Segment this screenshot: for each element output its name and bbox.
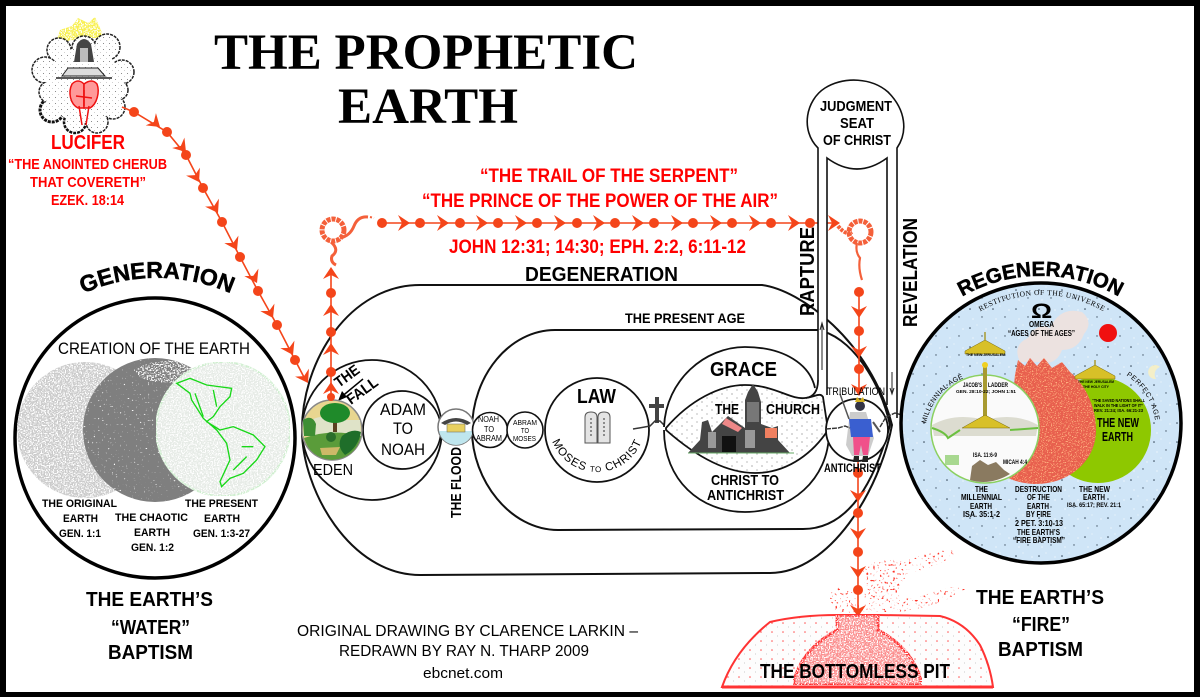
earth: original <box>17 362 153 498</box>
new earth text <box>1092 398 1145 444</box>
earth: present <box>156 362 290 496</box>
heading: generation: GENERATION <box>80 262 236 293</box>
label: judgment seat of Christ: SEAT <box>840 115 874 132</box>
cloud interior <box>33 35 133 132</box>
planet: millennial earth <box>931 362 1039 483</box>
arrow: horizontal trail <box>377 215 840 231</box>
label: millennial earth: ISA. 35:1-2 <box>963 509 1000 519</box>
icon: the flood <box>438 409 474 445</box>
earth labels: THE PRESENT <box>185 498 258 510</box>
Lucifer text <box>8 132 167 209</box>
fire baptism caption: “FIRE” <box>1012 614 1070 636</box>
icon: light rays <box>56 17 104 43</box>
heading: grace: GRACE <box>710 359 777 381</box>
icon: fire crescent <box>1005 358 1096 484</box>
Lucifer text: THAT COVERETH” <box>30 174 146 191</box>
credit text <box>297 623 638 682</box>
the fall label and arrow: FALL <box>343 374 382 408</box>
serpent trail text: “THE TRAIL OF THE SERPENT” <box>480 166 738 187</box>
arrow: trail down to the pit <box>850 287 867 640</box>
millennial age arc label: MILLENNIAL AGE <box>922 374 964 424</box>
panel: regeneration circle <box>899 262 1183 565</box>
earth labels: GEN. 1:3-27 <box>193 528 250 540</box>
icon: omega: Ω <box>1031 300 1052 323</box>
earth labels: THE CHAOTIC <box>115 512 188 524</box>
panel: Adam to Noah <box>363 391 441 469</box>
icon: stone tablets <box>585 412 610 443</box>
icon: Jacob's ladder <box>962 362 1010 428</box>
label: restitution of the universe: RESTITUTION OF THE UNIVERSE <box>978 290 1105 312</box>
label: destruction of the earth: “FIRE BAPTISM” <box>1013 535 1065 545</box>
label: judgment seat of Christ: JUDGMENT <box>820 98 892 115</box>
new earth text: EARTH <box>1102 429 1133 444</box>
panel: Abram to Moses: TO <box>521 428 529 435</box>
panel: Noah to Abram <box>472 412 508 448</box>
earth labels <box>42 498 258 554</box>
water baptism caption: BAPTISM <box>108 642 193 664</box>
panel: Noah to Abram: TO <box>484 425 494 434</box>
panel: Noah to Abram: ABRAM <box>476 434 502 443</box>
icon: antichrist figure <box>840 394 880 462</box>
label: the church <box>715 401 820 418</box>
labels: tribulation and antichrist: ANTICHRIST <box>824 461 882 475</box>
inner mound <box>793 615 922 685</box>
scripture text: ISA. 11:6-9 <box>973 453 998 459</box>
icon: red sun <box>1099 324 1117 342</box>
icon: crescent moon <box>1148 365 1160 379</box>
new earth text: REV. 21:24; ISA. 66:21-23 <box>1094 408 1143 413</box>
icon: serpent left <box>322 217 374 265</box>
label: millennial earth: THE <box>975 484 988 494</box>
panel: Abram to Moses <box>507 412 543 448</box>
church lens <box>666 385 828 473</box>
icon: red angel <box>70 81 98 125</box>
earth labels: THE ORIGINAL <box>42 498 117 510</box>
serpent trail text <box>422 166 778 258</box>
panel: Adam to Noah: TO <box>393 419 413 438</box>
label: Moses to Christ: MOSES TO CHRIST <box>552 438 640 472</box>
label: judgment seat of Christ: OF CHRIST <box>823 132 891 149</box>
label: millennial earth: MILLENNIAL <box>961 492 1002 502</box>
label: the church: THE <box>715 401 739 418</box>
label: destruction of the earth: OF THE <box>1027 492 1050 502</box>
label: Christ to Antichrist: ANTICHRIST <box>707 487 784 504</box>
earth labels: EARTH <box>204 513 240 525</box>
fire baptism caption: BAPTISM <box>998 639 1083 661</box>
panel: Adam to Noah: NOAH <box>381 440 425 459</box>
earth labels: GEN. 1:1 <box>59 528 101 540</box>
label: destruction of the earth <box>1013 484 1065 545</box>
scripture text: MICAH 4:4 <box>1003 460 1028 466</box>
label: omega ages <box>1008 320 1075 338</box>
arrow: rapture up <box>820 323 824 370</box>
new earth text: “THE SAVED NATIONS SHALL <box>1092 398 1145 403</box>
panel: Grace and the church <box>664 347 829 512</box>
panel: generation circle <box>13 262 297 580</box>
the fall label and arrow: THE <box>331 362 363 391</box>
icon: cloud <box>32 34 134 133</box>
panel: Law <box>544 377 650 483</box>
credit text: ORIGINAL DRAWING BY CLARENCE LARKIN – <box>297 623 638 640</box>
label: the new earth <box>1067 484 1121 509</box>
label: the new earth: THE NEW <box>1079 484 1111 494</box>
arrow: revelation down <box>890 372 894 394</box>
earth labels: EARTH <box>134 527 170 539</box>
label: judgment seat of Christ <box>820 98 892 149</box>
panel: Noah to Abram: NOAH <box>478 415 499 424</box>
heading: regeneration: REGENERATION <box>956 262 1124 296</box>
label: Eden: EDEN <box>313 462 353 479</box>
new earth text: THE NEW <box>1097 415 1140 430</box>
icon: smoke <box>1017 311 1089 363</box>
label: Christ to Antichrist <box>707 472 784 504</box>
jacob's ladder text <box>956 383 1017 394</box>
title: THE PROPHETIC <box>214 25 638 81</box>
label: Christ to Antichrist: CHRIST TO <box>711 472 779 489</box>
panel: Abram to Moses: MOSES <box>513 436 536 443</box>
label: omega ages: “AGES OF THE AGES” <box>1008 329 1075 338</box>
serpent trail text: “THE PRINCE OF THE POWER OF THE AIR” <box>422 191 778 212</box>
label: the flood: THE FLOOD <box>448 447 465 518</box>
jacob's ladder text: LADDER <box>988 383 1009 389</box>
title: EARTH <box>338 79 518 135</box>
icon: Lucifer cherub in cloud <box>32 17 134 133</box>
label: millennial earth: EARTH <box>970 501 992 511</box>
icon: new Jerusalem left <box>965 332 1006 357</box>
Lucifer text: EZEK. 18:14 <box>51 192 125 209</box>
arrow: diagonal trail from Lucifer <box>122 107 315 387</box>
icon: church building <box>688 384 794 453</box>
icon: cross and mound <box>633 397 678 429</box>
perfect age arc label: PERFECT AGE <box>1126 372 1160 420</box>
new earth text: WALK IN THE LIGHT OF IT” <box>1094 403 1143 408</box>
title <box>214 25 638 135</box>
icon: throne <box>56 39 112 78</box>
label: the bottomless pit: THE BOTTOMLESS PIT <box>760 661 950 683</box>
earth labels: GEN. 1:2 <box>131 542 174 554</box>
credit text: REDRAWN BY RAY N. THARP 2009 <box>339 643 589 660</box>
earth labels: EARTH <box>63 513 98 525</box>
fire baptism caption <box>976 587 1104 661</box>
icon: americas outline <box>177 378 265 487</box>
mound <box>826 413 905 429</box>
icon: serpent right <box>838 221 871 280</box>
label: destruction of the earth: EARTH <box>1027 501 1049 511</box>
water baptism caption <box>86 589 213 664</box>
panel: judgment seat and columns <box>806 80 904 418</box>
jacob's ladder text: GEN. 28:10-22; JOHN 1:51 <box>956 389 1017 394</box>
credit text: ebcnet.com <box>423 665 503 682</box>
icon: new Jerusalem right <box>1075 360 1115 389</box>
label: the new earth: ISA. 65:17; REV. 21:1 <box>1067 502 1121 509</box>
icon: new Jerusalem right: THE HOLY CITY <box>1083 384 1109 389</box>
panel: tribulation and antichrist <box>826 394 905 462</box>
label: omega ages: OMEGA <box>1029 320 1054 329</box>
panel: Abram to Moses: ABRAM <box>513 420 537 427</box>
earth: chaotic <box>83 358 227 502</box>
label: millennial earth <box>961 484 1002 519</box>
panel: Eden to Noah circle <box>302 360 442 500</box>
panel: Adam to Noah: ADAM <box>380 400 426 419</box>
panel: Eden picture <box>302 400 362 460</box>
arrow: vertical trail up to serpent <box>323 267 339 401</box>
panel: bottomless pit <box>722 550 993 687</box>
scripture text <box>973 453 1028 466</box>
panel: present age envelope <box>472 330 890 530</box>
labels: tribulation and antichrist: TRIBULATION <box>827 386 885 398</box>
label: destruction of the earth: THE EARTH’S <box>1017 527 1060 537</box>
jacob's ladder text: JACOB’S <box>963 383 982 389</box>
label: the church: CHURCH <box>766 401 820 418</box>
fire baptism caption: THE EARTH’S <box>976 587 1104 609</box>
icon: new Jerusalem right: THE NEW JERUSALEM <box>1078 379 1115 384</box>
water baptism caption: “WATER” <box>111 617 190 639</box>
Lucifer text: “THE ANOINTED CHERUB <box>8 156 167 173</box>
panel: degeneration envelope <box>302 285 892 575</box>
heading: the present age: THE PRESENT AGE <box>625 310 745 326</box>
icon: flames <box>830 550 968 613</box>
label: destruction of the earth: BY FIRE <box>1026 509 1051 519</box>
Lucifer text: LUCIFER <box>51 132 125 154</box>
the fall label and arrow <box>331 362 382 408</box>
panel: Law: LAW <box>577 386 616 408</box>
dome <box>722 615 993 687</box>
label: destruction of the earth: 2 PET. 3:10-13 <box>1015 518 1063 528</box>
label: rapture: RAPTURE <box>797 227 819 316</box>
planet: new earth <box>1045 377 1151 483</box>
label: the new earth: EARTH <box>1083 492 1105 502</box>
label: destruction of the earth: DESTRUCTION <box>1015 484 1062 494</box>
label: revelation: REVELATION <box>900 218 922 327</box>
heading: degeneration: DEGENERATION <box>525 264 678 286</box>
heading: creation of the earth: CREATION OF THE EARTH <box>58 339 250 358</box>
serpent trail text: JOHN 12:31; 14:30; EPH. 2:2, 6:11-12 <box>449 237 746 258</box>
labels: tribulation and antichrist <box>824 386 885 475</box>
icon: new Jerusalem left: THE NEW JERUSALEM <box>966 352 1006 357</box>
water baptism caption: THE EARTH’S <box>86 589 213 611</box>
